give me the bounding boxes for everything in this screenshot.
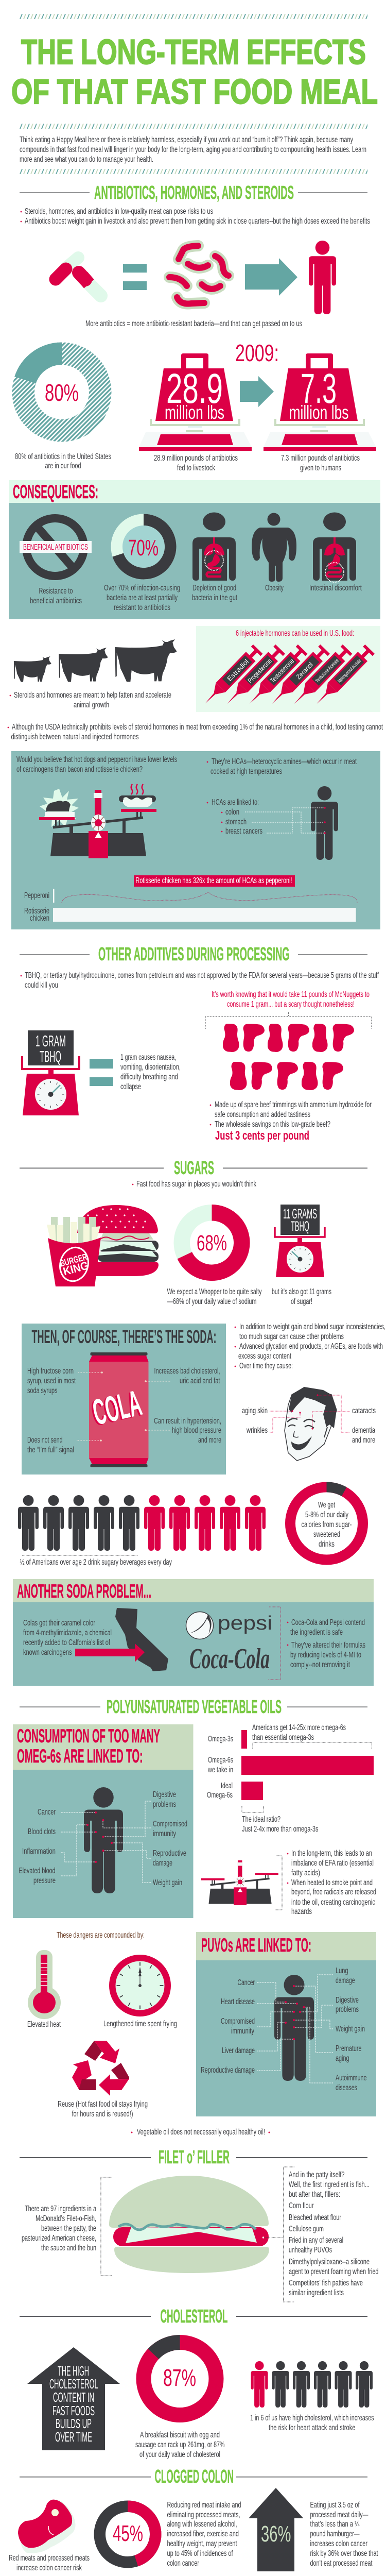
bar chart: HCAs: chicken	[30, 914, 49, 923]
icon: person with intestinal discomfort	[313, 512, 356, 582]
icon: 11 grams TBHQ scale: 11 GRAMS	[283, 1206, 317, 1222]
heading: cholesterol: CHOLESTEROL	[161, 2306, 227, 2327]
face callouts	[242, 1394, 376, 1445]
ring chart: 5-8% of calories: 5-8% of our daily	[305, 1511, 348, 1519]
bullets: beef trimmings: safe consumption and added tastiness	[215, 1110, 310, 1119]
text: 97 ingredients: between the patty, the	[41, 2224, 96, 2233]
bullet list: antibiotics	[21, 207, 370, 226]
icon: person with omega-6 effects	[61, 1787, 151, 1893]
icon: chicken on burst	[40, 789, 79, 827]
caption: livestock: 28.9 million pounds of antibiotics	[154, 454, 238, 463]
text: patty fillers: unhealthy PUVOs	[289, 2246, 332, 2255]
callout: corn syrup: High fructose corn	[27, 1367, 74, 1376]
text: processed meat: Eating just 3.5 oz of	[310, 2501, 360, 2510]
caption: 70%	[104, 584, 180, 612]
panel: PUVOs	[196, 1932, 376, 2116]
text: processed meat: that’s less than a ¼	[310, 2520, 360, 2529]
HCA linked list: colon	[225, 808, 239, 817]
donut chart: 80%	[23, 353, 100, 431]
panel: another soda problem: ANOTHER SODA PROBLEM...	[17, 1581, 151, 1602]
text: patty fillers: but after that, fillers:	[289, 2190, 340, 2199]
bullet: TBHQ: could kill you	[25, 981, 58, 990]
caption: humans	[281, 454, 360, 472]
caption: elevated heat: Elevated heat	[27, 2020, 61, 2029]
caption: 80% of antibiotics	[15, 452, 111, 470]
icon: small balance scale	[201, 1860, 278, 1905]
weight scale: 28.9 million lbs: million lbs	[165, 402, 224, 423]
bar chart: omega-3 vs omega-6: Ideal	[221, 1782, 233, 1790]
callout: 326x	[134, 875, 295, 887]
icon: bacteria	[169, 246, 229, 304]
bar chart: HCAs: Pepperoni	[24, 891, 49, 900]
text: TBHQ effects: 1 gram causes nausea,	[120, 1053, 176, 1062]
callout: cholesterol	[145, 1367, 220, 1385]
bullets: cola response: the ingredient is safe	[290, 1628, 343, 1637]
icon: person with PUVO effects	[257, 1975, 333, 2083]
icon: fries with Burger King logo: BURGER	[59, 1251, 89, 1269]
bullets: sugar problems	[235, 1323, 385, 1370]
callout: full signal	[27, 1436, 102, 1454]
labels: omega-6 effects	[19, 1790, 187, 1887]
weight scale: 28.9 million lbs	[139, 353, 252, 451]
labels: PUVO effects: immunity	[231, 2027, 254, 2036]
text: caramel color	[23, 1619, 112, 1657]
caption: reuse: for hours and is reused!)	[72, 2110, 133, 2119]
text: caramel color: known carcinogens	[23, 1648, 72, 1657]
weight scale: 7.3 million lbs: million lbs	[289, 402, 349, 423]
bullets: cola response	[287, 1618, 365, 1669]
syringe: melengestrol acetate: Melengestrol Acetate	[337, 658, 362, 684]
bar chart: omega-3 vs omega-6: Omega-6s	[207, 1791, 233, 1800]
panel: HCAs	[11, 751, 380, 929]
caption: livestock: fed to livestock	[177, 464, 215, 472]
syringe: tenbolone acetate	[290, 645, 353, 708]
text: patty fillers: Corn flour	[289, 2201, 314, 2210]
question text: of carcinogens than bacon and rotisserie chicken?	[16, 765, 143, 774]
bar chart: omega-3 vs omega-6: Omega-6s	[208, 1756, 233, 1765]
caption: breakfast biscuit	[135, 2431, 225, 2459]
caption: reuse: Reuse (Hot fast food oil stays frying	[58, 2100, 148, 2109]
donut chart: 45%: 45%	[113, 2521, 143, 2546]
bar chart: omega-3 vs omega-6: The ideal ratio?	[242, 1815, 280, 1824]
ring chart: 5-8% of calories: calories from sugar-	[302, 1520, 352, 1529]
donut chart: 68%	[182, 1213, 242, 1273]
labels: PUVO effects: Heart disease	[221, 1997, 255, 2006]
caption: frying time: Lengthened time spent frying	[103, 2020, 177, 2028]
icon: 11 grams TBHQ scale: TBHQ	[291, 1218, 309, 1234]
bar chart: omega-3 vs omega-6: than essential omega-3s	[252, 1733, 314, 1742]
bullets: sugar problems: Over time they cause:	[239, 1362, 293, 1370]
icon: fries with Burger King logo	[47, 1217, 101, 1286]
text: patty fillers: And in the patty itself?	[289, 2171, 345, 2179]
icon: aging face	[285, 1387, 337, 1461]
text: 97 ingredients: McDonald’s Filet-o-Fish,	[36, 2214, 96, 2223]
text: TBHQ effects: difficulty breathing and	[120, 1073, 178, 1081]
bar chart: omega-3 vs omega-6: Americans get 14-25x more omega-6s	[252, 1723, 346, 1732]
HCA linked list: stomach	[225, 818, 247, 826]
heading: omega-6: CONSUMPTION OF TOO MANY	[17, 1725, 160, 1747]
caption: depletion	[192, 584, 237, 602]
syringe: melengestrol acetate	[312, 645, 375, 708]
HCA linked list	[207, 798, 262, 836]
labels: PUVO effects: Weight gain	[336, 2025, 365, 2033]
syringe: zeranol	[267, 645, 330, 708]
icon: cola can	[87, 1352, 148, 1467]
caption: depletion: bacteria in the gut	[192, 594, 237, 602]
heading: omega-6: OMEG-6s ARE LINKED TO:	[17, 1745, 143, 1767]
face callouts: aging skin	[242, 1406, 268, 1415]
bullet list: antibiotics: Steroids, hormones, and antibiotics in low-quality meat can pose risks to us	[25, 207, 213, 216]
text: reducing red meat: along with lessened alcohol,	[167, 2520, 237, 2529]
panel: consequences	[9, 480, 380, 619]
face callouts: and more	[352, 1436, 375, 1445]
caption: humans: given to humans	[300, 464, 341, 472]
caption: resistance	[30, 587, 82, 605]
weight scale: 28.9 million lbs: 28.9	[166, 365, 223, 412]
callout: corn syrup: syrup, used in most	[27, 1377, 76, 1385]
icon: person with gut bacteria depleted	[192, 512, 236, 581]
labels: omega-6 effects: pressure	[33, 1876, 56, 1885]
icon: Filet-o-Fish	[109, 2176, 283, 2273]
labels: PUVO effects: Premature	[336, 2044, 361, 2053]
callout: full signal: the “I’m full” signal	[27, 1446, 74, 1454]
icon: equals sign	[90, 1059, 113, 1086]
bar chart: omega-3 vs omega-6	[207, 1723, 374, 1834]
syringe: testosterone: Testosterone	[269, 657, 295, 685]
text: 97 ingredients: pasteurized American cheese,	[22, 2234, 96, 2243]
arrow	[240, 376, 274, 407]
bullets: cola response: comply--not removing it	[290, 1660, 350, 1669]
labels: omega-6 effects: immunity	[153, 1829, 176, 1838]
bullet: USDA	[8, 723, 383, 741]
labels: PUVO effects: Liver damage	[222, 2046, 255, 2055]
bar chart: HCAs: Rotisserie	[24, 907, 49, 916]
syringe: progesterone	[222, 645, 285, 708]
text: patty fillers	[289, 2171, 379, 2297]
caption: red meats	[9, 2554, 90, 2572]
syringe: estradiol: Estradiol	[225, 657, 250, 683]
bullets: beef trimmings: Just 3 cents per pound	[215, 1129, 309, 1143]
bullet: HCAs: cooked at high temperatures	[210, 767, 282, 776]
icon: obese person	[252, 513, 296, 582]
labels: omega-6 effects: Weight gain	[153, 1878, 182, 1887]
text: 97 ingredients: the sauce and the bun	[41, 2244, 96, 2252]
text: reducing red meat	[167, 2501, 241, 2568]
labels: PUVO effects: aging	[336, 2054, 349, 2063]
bar chart: omega-3 vs omega-6: we take in	[207, 1766, 233, 1774]
bullets: EFA ratio: fatty acids)	[291, 1869, 320, 1877]
labels: omega-6 effects: Inflammation	[22, 1847, 56, 1856]
caption: resistance: Resistance to	[39, 587, 73, 596]
logo: Pepsi	[186, 1612, 272, 1639]
labels: PUVO effects: Digestive	[336, 1996, 359, 2005]
text: caramel color: recently added to Calfornia’s list of	[23, 1638, 110, 1647]
ring chart: 5-8% of calories: drinks	[319, 1540, 335, 1549]
heading: consequences: CONSEQUENCES:	[13, 481, 98, 502]
caption: livestock	[154, 454, 238, 472]
caption: intestinal discomfort: Intestinal discomfort	[309, 584, 362, 592]
caption: breakfast biscuit: of your daily value of cholesterol	[139, 2450, 220, 2459]
people chart: half of Americans	[18, 1495, 266, 1567]
syringe: estradiol	[200, 645, 263, 708]
arrow: cholesterol builds up: THE HIGH	[58, 2363, 89, 2379]
icon: no antibiotics sign	[20, 518, 92, 576]
text: patty fillers: Bleached wheat flour	[289, 2213, 341, 2222]
arrow	[75, 1643, 145, 1662]
labels: PUVO effects: Reproductive damage	[201, 2066, 255, 2075]
caption: 70%: Over 70% of infection-causing	[104, 584, 180, 592]
bullet: steroids and hormones: animal growth	[74, 701, 109, 709]
bullets: sugar problems: excess sugar content	[238, 1352, 291, 1361]
callout: cholesterol: Increases bad cholesterol,	[154, 1367, 220, 1376]
heading: filet o' filler: FILET o’ FILLER	[159, 2146, 230, 2167]
donut chart: 68%: 68%	[197, 1231, 227, 1256]
labels: PUVO effects: Compromised	[221, 2017, 255, 2026]
icon: 1 gram TBHQ scale: TBHQ	[40, 1047, 61, 1065]
panel: omega-6 links	[13, 1724, 194, 1918]
arrow: cholesterol builds up: CHOLESTEROL	[49, 2376, 98, 2392]
labels: PUVO effects: Cancer	[238, 1978, 255, 1987]
face callouts: wrinkles	[246, 1426, 268, 1435]
intro text: more and see what you can do to manage your health.	[20, 155, 153, 164]
arrow: cholesterol builds up: FAST FOODS	[52, 2403, 95, 2418]
caption: 80% of antibiotics: 80% of antibiotics in the United States	[15, 452, 111, 461]
labels: omega-6 effects: Reproductive	[153, 1849, 186, 1858]
text: reducing red meat: colon cancer	[167, 2559, 199, 2568]
icon: 1 gram TBHQ scale: 1 GRAM	[36, 1032, 66, 1050]
text: reducing red meat: Reducing red meat intake and	[167, 2501, 241, 2510]
caption: antibiotic resistance: More antibiotics = more antibiotic-resistant bacteria—and that can get passed on to us	[85, 319, 302, 328]
bar chart: omega-3 vs omega-6: Just 2-4x more than omega-3s	[242, 1825, 319, 1834]
arrow: 36%: 36%	[261, 2521, 291, 2547]
icon: hot dog with steam	[119, 784, 156, 807]
map: California	[115, 1608, 168, 1671]
question text: Would you believe that hot dogs and pepperoni have lower levels	[16, 755, 177, 764]
ring chart: 5-8% of calories	[290, 1487, 363, 1560]
face callouts: cataracts	[352, 1406, 376, 1415]
text: 97 ingredients	[22, 2205, 96, 2252]
caption: Whopper sugar: of sugar!	[291, 1297, 312, 1306]
callout: corn syrup: soda syrups	[27, 1386, 58, 1395]
text: TBHQ effects: collapse	[120, 1082, 141, 1091]
callout: hypertension	[145, 1417, 221, 1445]
subheading: compounded dangers: These dangers are compounded by:	[57, 1931, 145, 1940]
icon: cola can: COLA	[89, 1382, 145, 1433]
icon: cola can: COLA	[87, 1383, 144, 1434]
bullets: EFA ratio: hazards	[291, 1907, 312, 1916]
text: caramel color: Colas get their caramel color	[23, 1619, 95, 1628]
icon: clock	[109, 1955, 171, 2016]
face callouts: dementia	[352, 1426, 375, 1435]
donut chart: 87%: 87%	[163, 2364, 196, 2391]
caption: 70%: bacteria are at least partially	[107, 594, 178, 602]
caption: resistance: beneficial antibiotics	[30, 597, 82, 605]
donut chart: 80%: 80%	[45, 379, 79, 406]
logo: Coca-Cola: Coca-Cola	[189, 1643, 270, 1675]
text: processed meat	[310, 2501, 378, 2568]
bar chart: omega-3 vs omega-6: Omega-3s	[208, 1735, 233, 1743]
panel: soda	[22, 1324, 226, 1475]
icon: thermometer	[28, 1950, 61, 2019]
note: vegetable oil: Vegetable oil does not necessarily equal healthy oil!	[137, 2128, 265, 2137]
people chart: 1 in 6	[250, 2361, 374, 2432]
icon: steak	[18, 2500, 76, 2553]
bullet: USDA: distinguish between natural and injected hormones	[11, 733, 139, 741]
icon: pills	[56, 258, 101, 296]
syringe: progesterone: Progesterone	[246, 657, 273, 685]
ring chart: 5-8% of calories: We get	[318, 1501, 335, 1510]
text: 97 ingredients: There are 97 ingredients in a	[25, 2205, 96, 2213]
donut chart: 87%	[144, 2342, 216, 2415]
arrow: cholesterol builds up: CONTENT IN	[53, 2389, 94, 2405]
text: reducing red meat: healthy weight, may prevent	[167, 2539, 237, 2548]
caption: breakfast biscuit: A breakfast biscuit with egg and	[140, 2431, 220, 2439]
syringe: testosterone	[245, 645, 308, 708]
callout: hypertension: and more	[198, 1436, 221, 1445]
question text	[16, 755, 177, 774]
arrow: cholesterol builds up	[27, 2347, 120, 2450]
text: patty fillers: Cellulose gum	[289, 2225, 324, 2233]
icon: recycling arrows	[72, 2041, 129, 2096]
labels: PUVO effects: damage	[336, 1976, 355, 1985]
caption: Whopper sugar: but it’s also got 11 grams	[272, 1287, 331, 1296]
caption: Whopper sugar	[272, 1287, 331, 1306]
HCA linked list: breast cancers	[225, 827, 262, 836]
title	[11, 32, 378, 111]
bullet: steroids and hormones	[10, 691, 171, 709]
labels: PUVO effects	[201, 1967, 366, 2092]
caption: 70%: resistant to antibiotics	[114, 603, 170, 612]
icon: equals sign	[123, 264, 147, 290]
bullet: HCAs	[207, 757, 357, 776]
icon: Whopper burger	[77, 1205, 159, 1276]
bullet: sugar: Fast food has sugar in places you wouldn’t think	[136, 1180, 256, 1189]
labels: omega-6 effects: Blood clots	[28, 1827, 56, 1836]
HCA linked list: HCAs are linked to:	[212, 798, 259, 807]
callout: 326x: Rotisserie chicken has 326x the amount of HCAs as pepperoni!	[136, 876, 292, 885]
caption: depletion: Depletion of good	[192, 584, 236, 592]
callout: corn syrup	[27, 1367, 103, 1395]
weight scale: 7.3 million lbs	[264, 353, 376, 451]
heading: omega-6	[17, 1725, 160, 1767]
icon: person	[309, 241, 336, 314]
panel: another soda problem	[13, 1579, 374, 1686]
text: TBHQ effects: vomiting, disorientation,	[120, 1063, 181, 1072]
labels: omega-6 effects: Digestive	[153, 1790, 176, 1799]
bullets: beef trimmings: The wholesale savings on this low-grade beef?	[215, 1120, 330, 1129]
callout: full signal: Does not send	[27, 1436, 63, 1445]
icon: 1 gram TBHQ scale	[22, 1030, 79, 1115]
text: caramel color: from 4-methylimidazole, a chemical	[23, 1629, 112, 1637]
bullets: EFA ratio	[287, 1849, 376, 1916]
text: reducing red meat: eliminating processed meats,	[167, 2511, 240, 2519]
donut chart: 70%	[111, 514, 176, 579]
labels: PUVO effects: diseases	[336, 2083, 357, 2092]
text: reducing red meat: increased fiber, exercise and	[167, 2530, 239, 2538]
heading: clogged colon: CLOGGED COLON	[154, 2466, 234, 2487]
arrow: cholesterol builds up: BUILDS UP	[56, 2416, 92, 2431]
arrow	[245, 258, 297, 296]
syringe: tenbolone acetate: Tenbolone Acetate	[314, 658, 340, 684]
people chart: 1 in 6: the risk for heart attack and stroke	[269, 2424, 355, 2432]
donut chart: 45%	[100, 2506, 155, 2562]
text: patty fillers: similar ingredient lists	[289, 2289, 344, 2297]
bar chart: HCAs	[24, 889, 357, 923]
icon: fries with Burger King logo: KING	[62, 1259, 90, 1278]
bullets: beef trimmings	[210, 1100, 372, 1143]
heading: sugars: SUGARS	[174, 1157, 214, 1178]
text: processed meat: pound hamburger—	[310, 2530, 360, 2538]
ring chart: 5-8% of calories: sweetened	[313, 1530, 340, 1539]
bullets: sugar problems: too much sugar can cause other problems	[239, 1332, 344, 1341]
icon: no antibiotics sign: BENEFICIAL ANTIBIOTICS	[23, 543, 88, 552]
note: McNuggets	[212, 990, 370, 1009]
bullet: TBHQ	[21, 971, 379, 990]
intro text	[20, 135, 366, 164]
labels: PUVO effects: Autoimmune	[336, 2074, 366, 2082]
icon: McNuggets	[223, 1024, 354, 1090]
panel: injectable hormones	[196, 626, 380, 712]
arrow: cholesterol builds up: OVER TIME	[55, 2429, 92, 2445]
labels: omega-6 effects: problems	[153, 1800, 176, 1809]
callout: cholesterol: uric acid and fat	[180, 1377, 220, 1385]
caption: 80% of antibiotics: are in our food	[45, 462, 81, 470]
caption: red meats: increase colon cancer risk	[16, 2564, 82, 2572]
icon: person with cancer sites	[245, 786, 338, 860]
weight scale: 7.3 million lbs: 7.3	[301, 365, 337, 412]
icon: balance scale	[39, 790, 156, 858]
callout: hypertension: Can result in hypertension,	[154, 1417, 221, 1426]
labels: omega-6 effects: Compromised	[153, 1820, 187, 1828]
label: 2009: 2009:	[235, 340, 279, 366]
logo: Pepsi: pepsi	[218, 1613, 272, 1634]
labels: PUVO effects: Lung	[336, 1967, 348, 1975]
caption: obesity: Obesity	[265, 584, 284, 592]
labels: omega-6 effects: damage	[153, 1859, 172, 1868]
syringe: zeranol: Zeranol	[294, 660, 314, 681]
icon: growing cows	[14, 639, 177, 682]
labels: omega-6 effects: Elevated blood	[19, 1867, 56, 1875]
caption: red meats: Red meats and processed meats	[9, 2554, 90, 2563]
caption: Whopper sodium	[167, 1287, 262, 1306]
caption: Whopper sodium: —68% of your daily value of sodium	[167, 1297, 256, 1306]
icon: 11 grams TBHQ scale	[275, 1205, 325, 1277]
text: reducing red meat: up to 45% of incidences of	[167, 2549, 233, 2558]
text: TBHQ effects	[120, 1053, 181, 1091]
caption: reuse	[58, 2100, 148, 2119]
labels: omega-6 effects: Cancer	[38, 1808, 56, 1817]
text: patty fillers: Fried in any of several	[289, 2236, 343, 2245]
caption: Whopper sodium: We expect a Whopper to be quite salty	[167, 1287, 262, 1296]
callout: hypertension: high blood pressure	[172, 1426, 221, 1435]
arrow: 36%	[249, 2488, 304, 2571]
bullet: steroids and hormones: Steroids and hormones are meant to help fatten and accelerate	[14, 691, 171, 700]
donut chart: 70%: 70%	[128, 535, 159, 561]
caption: breakfast biscuit: sausage can rack up 261mg, or 87%	[135, 2441, 225, 2449]
labels: PUVO effects: problems	[336, 2005, 359, 2014]
people chart: half of Americans: ½ of Americans over age 2 drink sugary beverages every day	[20, 1558, 172, 1567]
